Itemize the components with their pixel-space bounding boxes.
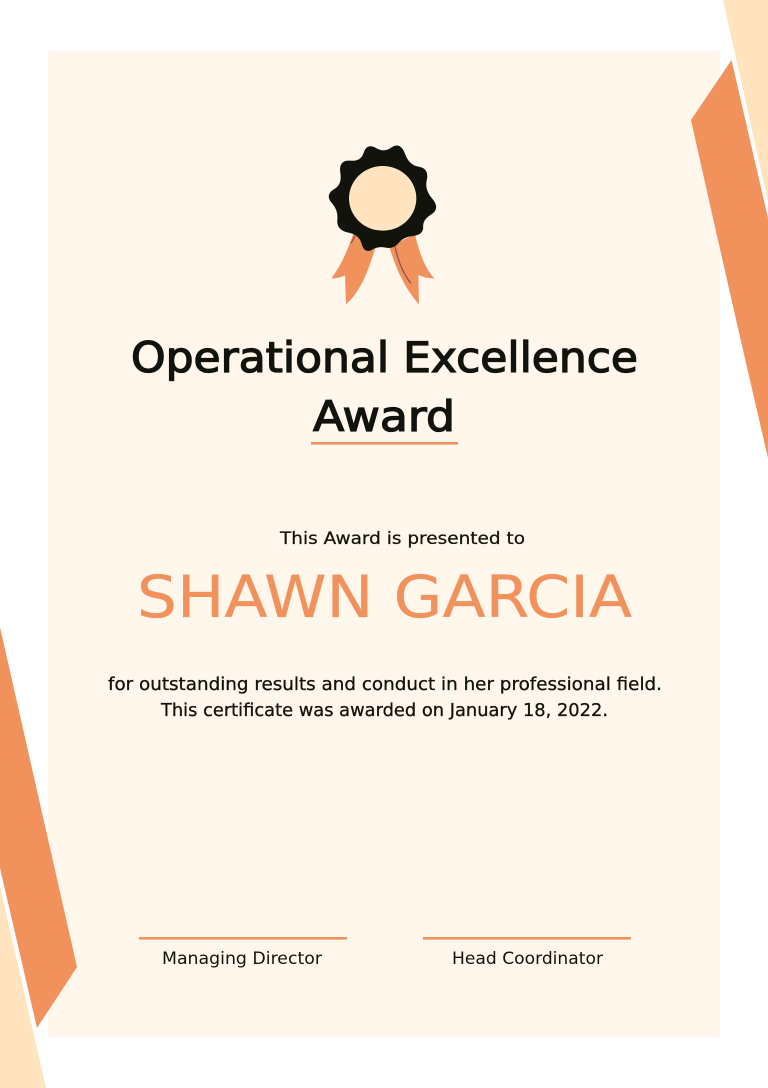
title underline xyxy=(311,442,458,445)
text: citation: This certificate was awarded on January 18, 2022. xyxy=(160,701,608,721)
icon: seal xyxy=(330,146,435,250)
icon: seal centre xyxy=(349,166,416,231)
text: citation: for outstanding results and conduct in her professional field. xyxy=(108,675,662,695)
panel: certificate background xyxy=(48,51,720,1037)
decoration: bottom left light band xyxy=(0,886,46,1088)
recipient name: SHAWN GARCIA xyxy=(137,564,632,631)
icon: right ribbon xyxy=(389,234,434,304)
signature: managing director: Managing Director xyxy=(162,949,322,968)
decoration: top right light band xyxy=(723,0,768,202)
decoration: top right orange band xyxy=(691,60,768,458)
title: Operational Excellence xyxy=(131,333,638,382)
decoration: bottom left orange band xyxy=(0,627,77,1028)
title: Award xyxy=(313,392,455,441)
icon: award rosette xyxy=(330,146,435,304)
title xyxy=(131,333,638,441)
signature: head coordinator: Head Coordinator xyxy=(452,949,603,968)
icon: left ribbon xyxy=(331,233,376,304)
text: presented to: This Award is presented to xyxy=(279,529,525,549)
text: citation xyxy=(108,675,662,721)
icon: ribbon fold lines xyxy=(351,236,411,283)
